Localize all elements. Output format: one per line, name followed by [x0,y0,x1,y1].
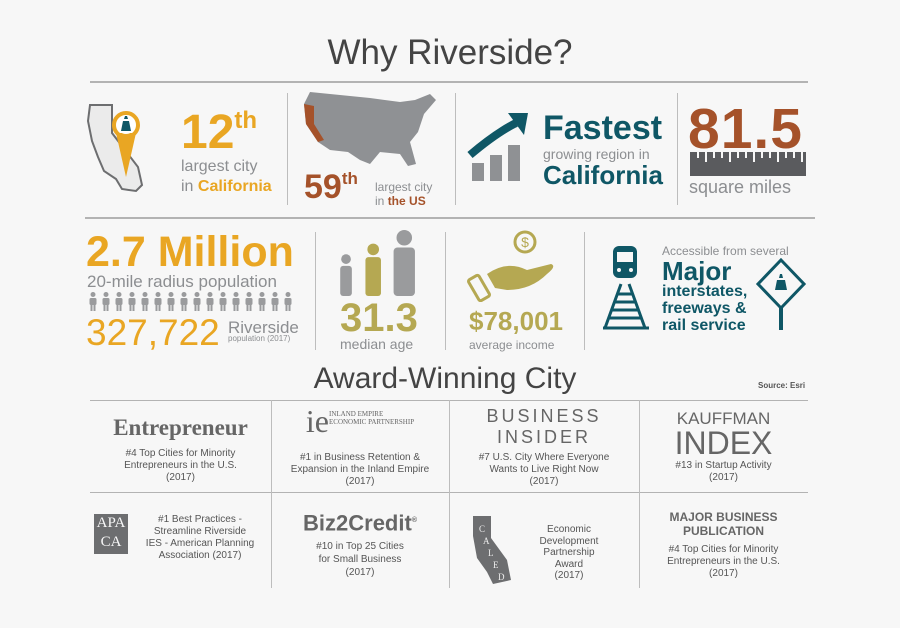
icon: family [340,230,415,296]
award: APA [94,514,254,561]
icon: ruler [690,152,806,176]
panel: 59th largest city US [304,92,436,208]
panel: 12th largest city [87,104,272,195]
award: Kauffman Index [675,409,772,483]
panel: accessibility: rail service [662,317,746,334]
award grid: IES - American Planning [146,538,254,549]
text: source: Source: Esri [758,381,805,390]
panel: population: Riverside [228,318,299,337]
text: largest city in California [181,158,272,195]
stat: 31.3: 31.3 [340,296,418,340]
panel: population [86,228,299,353]
panel: population: population (2017) [228,334,290,343]
award grid: APA [97,515,125,531]
text: median age: median age [340,336,413,352]
award: Biz2Credit: Biz2Credit® [303,510,417,535]
award: Major Business Publication: Entrepreneurs in the U.S. [667,556,780,567]
award grid: Association (2017) [159,550,241,561]
panel: accessibility: interstates, [662,283,747,300]
stat: 2.7 Million: 2.7 Million [86,228,294,276]
award: Major Business Publication: #4 Top Cities for Minority [669,544,778,555]
stat: 327,722 Riverside: 327,722 [86,312,220,353]
panel: fastest growing: California [543,160,663,190]
icon: people row [90,292,292,311]
award: Business Insider: BUSINESS [486,406,602,426]
award: Inland Empire: Expansion in the Inland Empire [291,464,429,475]
icon: train and track [603,246,649,330]
award: Kauffman Index: INDEX [675,425,772,461]
text: largest city in California: largest city [181,158,257,175]
award grid: CA [101,534,121,550]
award: Biz2Credit: #10 in Top 25 Cities [316,541,404,552]
panel: accessibility [603,244,806,334]
award: Entrepreneur: #4 Top Cities for Minority [126,448,235,459]
award: Inland Empire: ECONOMIC PARTNERSHIP [329,418,414,426]
award grid: L [488,548,494,558]
icon: california map with pin [87,104,144,192]
award grid: E [493,560,499,570]
award grid: Development [540,536,598,546]
award: Inland Empire [291,403,429,487]
text: Accessible from several Major interstates: Accessible from several [662,244,789,258]
stat: 59th: 59th [304,168,358,206]
award grid: Partnership [543,547,595,558]
panel: accessibility: Major [662,256,731,286]
panel: median age [340,230,418,352]
award: Inland Empire: INLAND EMPIRE [329,410,383,418]
award: CALED [473,516,598,584]
award: Inland Empire: ie [306,403,329,439]
award: Business Insider [478,406,609,487]
panel: fastest growing: growing region in [543,146,650,162]
award: Major Business Publication: (2017) [709,568,738,579]
award: Biz2Credit [303,510,417,578]
award: Kauffman Index: (2017) [709,472,738,483]
award: Inland Empire: #1 in Business Retention & [300,452,420,463]
award grid [90,400,808,588]
award: Major Business Publication [667,510,780,579]
award: Kauffman Index: #13 in Startup Activity [675,460,772,471]
icon: hand with coin [467,230,554,302]
award: Entrepreneur: (2017) [166,472,195,483]
award grid: Award [555,558,583,570]
icon: US map [304,92,436,166]
award: Entrepreneur [113,415,248,483]
award: Business Insider: Wants to Live Right Now [489,464,599,475]
panel: fastest growing [468,109,664,190]
text: average income: average income [469,338,554,352]
award grid: A [483,536,490,546]
text: largest city in the US: in the US [375,194,426,208]
award: Biz2Credit: for Small Business [319,554,401,565]
award grid: C [479,524,485,534]
panel: accessibility: freeways & [662,300,746,317]
award: Business Insider: (2017) [530,476,558,487]
panel: average income [467,230,563,352]
award: Biz2Credit: (2017) [346,567,374,578]
text: largest city in the US: largest city [375,180,432,194]
text: 20-mile radius population: 20-mile radius population [87,272,277,291]
stat: 81.5: 81.5 [688,97,803,161]
award grid: D [498,572,505,582]
text: Fastest growing region in California: Fastest [543,109,662,147]
award: Kauffman Index: KAUFFMAN [677,409,770,428]
heading: Award-Winning City: Award-Winning City [314,362,576,395]
icon: growth chart arrow [468,113,528,181]
award: Entrepreneur: Entrepreneurs in the U.S. [124,460,237,471]
panel: 81.5 square miles [688,97,806,197]
award: Business Insider: #7 U.S. City Where Everyone [479,452,609,463]
award grid: (2017) [555,570,583,581]
icon: road sign [756,258,806,330]
award grid: #1 Best Practices - [158,514,242,525]
award: Major Business Publication: MAJOR BUSINESS [669,510,778,524]
award: Business Insider: INSIDER [497,427,591,447]
title: Why Riverside? [327,33,573,72]
text: largest city in California: in California [181,178,272,195]
text: largest city in the US [375,180,432,208]
award grid: Streamline Riverside [154,526,246,537]
award: Major Business Publication: PUBLICATION [683,524,764,538]
stat: 12th: 12th [181,106,257,159]
award grid: Economic [547,524,591,535]
stat: $78,001: $78,001 [469,306,563,336]
award: Inland Empire: (2017) [346,476,374,487]
award: Entrepreneur: Entrepreneur [113,415,248,440]
text: square miles: square miles [689,177,791,197]
icon: hand with coin: $ [521,234,529,250]
